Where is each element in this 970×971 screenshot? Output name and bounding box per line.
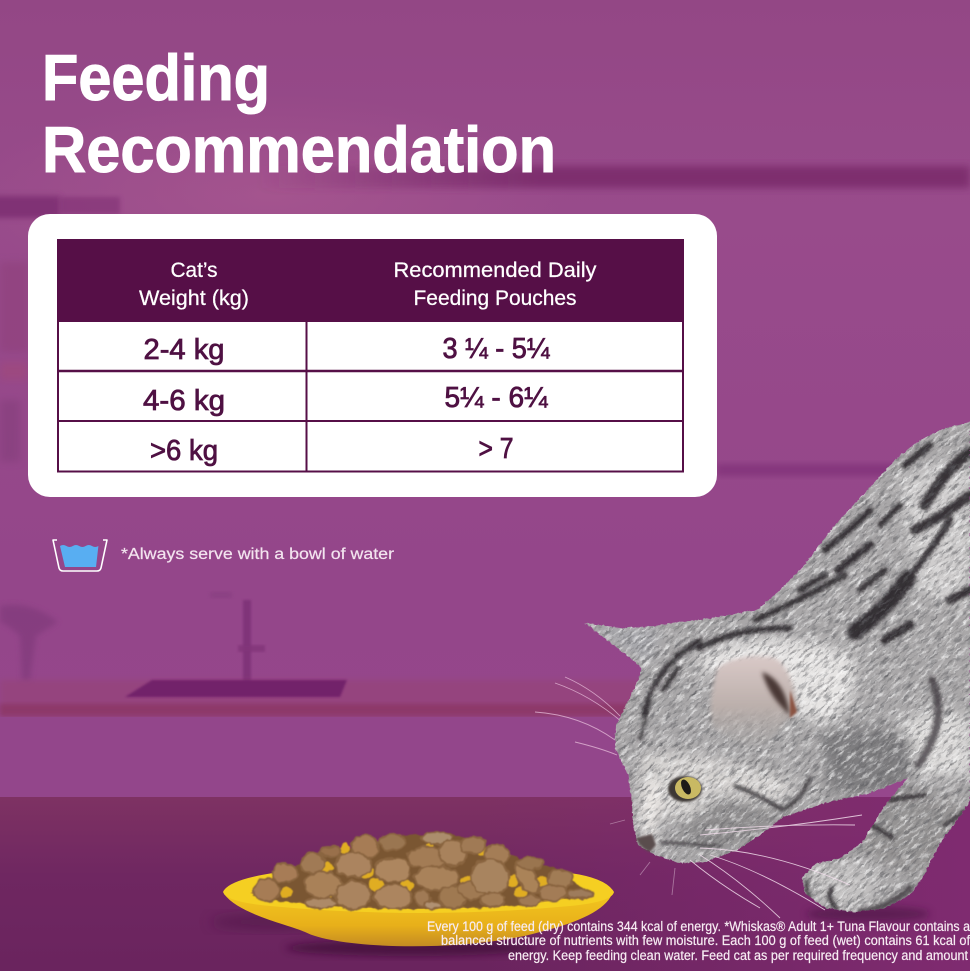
- table header: Recommended Daily: [394, 259, 597, 282]
- cat ear inner: [711, 656, 797, 745]
- water note: *Always serve with a bowl of water: [121, 546, 394, 563]
- cat nose: [636, 834, 656, 852]
- table header: Weight (kg): [139, 287, 249, 310]
- table values: 3 ¼ - 5¼: [442, 333, 550, 365]
- cat photo illustration: [535, 415, 970, 925]
- cat eye: [668, 776, 702, 802]
- yellow plate: [223, 868, 614, 946]
- table values: 5¼ - 6¼: [444, 382, 548, 414]
- table values: [143, 333, 550, 467]
- bowl shadow: [210, 914, 535, 956]
- table header: Cat’s: [170, 259, 218, 282]
- food bowl: [210, 832, 614, 956]
- faucet: [243, 600, 251, 682]
- table values: 4-6 kg: [143, 385, 225, 417]
- cat fur highlights: [780, 679, 781, 681]
- table grid: [58, 321, 683, 472]
- table values: 2-4 kg: [144, 334, 224, 366]
- title: Feeding: [42, 41, 270, 114]
- title: Recommendation: [42, 113, 556, 186]
- cat body: [580, 415, 970, 925]
- panel: feeding table card: [28, 214, 717, 497]
- table values: >6 kg: [150, 435, 218, 467]
- icon: bowl of water: [53, 540, 107, 571]
- table header: [57, 239, 684, 321]
- cat dark markings: [640, 445, 970, 912]
- cat whiskers right: [610, 815, 862, 918]
- table values: > 7: [478, 433, 514, 465]
- cat fur shadows: [780, 679, 781, 681]
- title: [42, 41, 556, 186]
- plant: [0, 605, 58, 680]
- food chunks: [252, 832, 592, 909]
- sink: [125, 680, 347, 697]
- table header: Feeding Pouches: [414, 287, 576, 310]
- cat whiskers left: [535, 677, 622, 755]
- paw shadow: [806, 906, 930, 922]
- counter: [0, 680, 660, 716]
- fine print: [427, 919, 970, 963]
